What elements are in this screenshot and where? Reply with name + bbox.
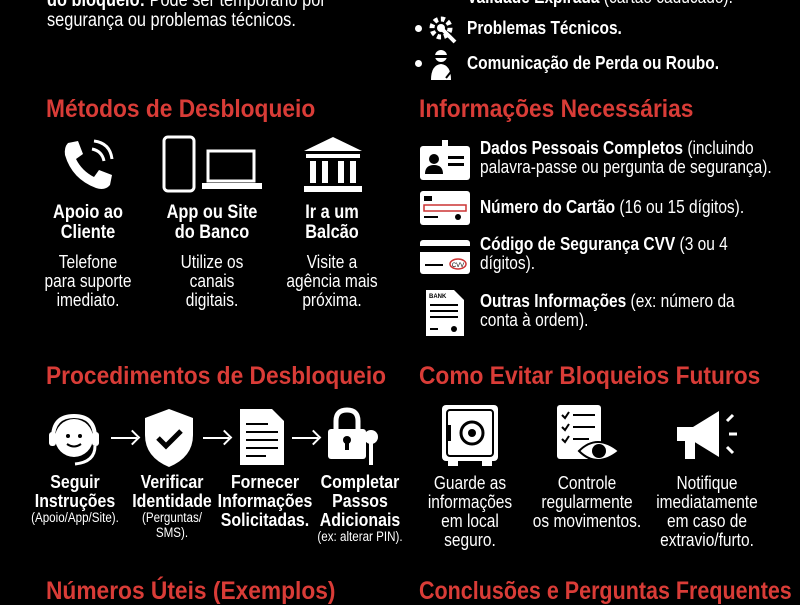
tip 3: imediatamente [656,492,758,512]
tip 1: Guarde as [434,473,506,493]
icon: lock and key [328,408,378,465]
item: problemas técnicos [415,16,622,44]
step 2: (Perguntas/ [142,510,202,525]
info: outras: BANK [429,294,447,300]
step 2: Identidade [132,490,212,511]
intro text [47,0,326,31]
info: outras: conta à ordem). [480,310,588,330]
heading: procedimentos: Procedimentos de Desbloqueio [46,362,386,390]
step 3: Solicitadas. [221,509,309,530]
tip 1: informações [428,492,512,512]
icon: bank [304,137,362,192]
panel: como evitar [428,405,758,550]
info: outras: Outras Informações (ex: número da [480,291,735,311]
arrow 2 [203,437,229,439]
tip 2: Controle [558,473,616,493]
arrow 3 [292,437,318,439]
method: balcão: Balcão [305,222,359,243]
icon: headset [49,414,99,466]
info: cvv: Código de Segurança CVV (3 ou 4 [480,234,728,254]
causes list [415,0,733,80]
method: app: Utilize os [181,252,243,272]
info: número do cartão: Número do Cartão (16 ou 15 dígitos). [480,197,744,217]
info: cvv [420,234,728,274]
step 2 [132,471,212,540]
icon: safe [442,405,498,466]
method: balcão: agência mais [286,271,378,291]
panel: métodos [45,136,378,310]
step 4: Completar [321,471,399,492]
step 2: SMS). [156,525,188,540]
icon: megaphone [677,411,737,459]
info: dados pessoais: Dados Pessoais Completos (incluindo [480,138,754,158]
icon: shield [145,409,193,467]
method: apoio: Telefone [59,252,117,272]
method: balcão: Ir a um [305,202,359,223]
info: dados pessoais [420,138,772,180]
step 1: Seguir [50,471,100,492]
step 4: (ex: alterar PIN). [317,529,403,544]
arrow 1 [111,437,137,439]
item: perda ou roubo [415,50,719,80]
method: balcão: próxima. [302,290,362,310]
icon: phone and laptop [162,136,262,192]
tip 3: Notifique [676,473,738,493]
info: cvv: dígitos). [480,253,535,273]
heading: como evitar: Como Evitar Bloqueios Futuros [419,362,760,390]
method: app: canais [190,271,234,291]
tip 2: os movimentos. [533,511,641,531]
heading: conclusões: Conclusões e Perguntas Frequentes [419,577,792,605]
step 1 [31,471,119,525]
step 3: Informações [218,490,312,511]
item: perda ou roubo: Comunicação de Perda ou Roubo. [467,53,719,73]
method: apoio [45,202,131,310]
info: número do cartão [420,191,744,225]
method: app: digitais. [186,290,238,310]
icon: document [240,409,284,465]
method: app: App ou Site [167,202,257,223]
method: apoio: imediato. [57,290,119,310]
method: apoio: Apoio ao [53,202,123,223]
step 3 [218,471,312,530]
step 2: Verificar [141,471,203,492]
step 4 [317,471,403,544]
tip 1: seguro. [444,530,496,550]
step 4: Adicionais [320,509,400,530]
method: app: do Banco [175,222,249,243]
step 4: Passos [332,490,388,511]
info: outras [426,290,735,336]
heading: números úteis: Números Úteis (Exemplos) [46,577,336,605]
heading: informações: Informações Necessárias [419,95,693,123]
tip 1: em local [441,511,499,531]
tip 3: extravio/furto. [660,530,754,550]
info: dados pessoais: palavra-passe ou pergunta de segurança). [480,157,772,177]
method: apoio: Cliente [61,222,115,243]
step 3: Fornecer [231,471,299,492]
method: balcão [286,202,378,310]
step 1: Instruções [35,490,115,511]
method: apoio: para suporte [45,271,131,291]
icon: checklist with eye [557,405,618,459]
tip 3: em caso de [667,511,747,531]
tip 2 [533,473,641,531]
tip 2: regularmente [541,492,633,512]
method: balcão: Visite a [307,252,357,272]
tip 1 [428,473,512,550]
info: cvv: CVV [452,263,464,269]
item: problemas técnicos: Problemas Técnicos. [467,18,622,38]
panel: procedimentos [31,408,403,544]
panel: informações [420,138,772,336]
icon: phone [64,140,114,189]
heading: métodos: Métodos de Desbloqueio [46,95,315,123]
step 1: (Apoio/App/Site). [31,510,119,525]
tip 3 [656,473,758,550]
intro text: segurança ou problemas técnicos. [47,10,296,31]
method: app [167,202,257,310]
